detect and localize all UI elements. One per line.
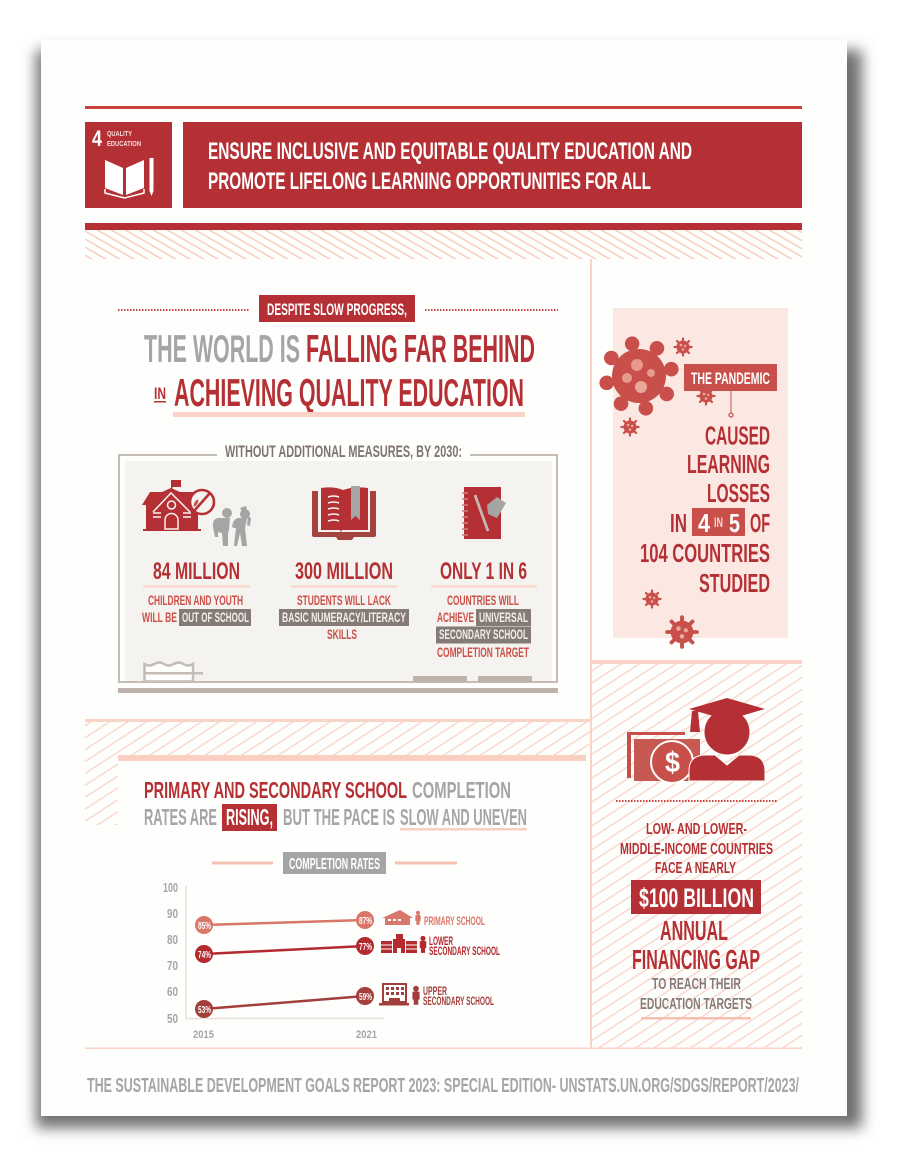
series: lower secondary [195, 937, 374, 963]
series: upper secondary: 53% [198, 1005, 211, 1016]
text: caused learning losses: IN [670, 508, 687, 538]
stat: 84 million [142, 558, 251, 626]
icon: small viruses [622, 338, 697, 647]
text: caused learning losses: 104 COUNTRIES [640, 538, 770, 568]
y axis labels: 50 [167, 1012, 178, 1026]
stat: only 1 in 6: SECONDARY SCHOOL [439, 627, 528, 642]
callout: 100 billion: $100 BILLION [639, 883, 754, 913]
series: upper secondary: 59% [359, 992, 372, 1003]
text: annual financing gap: FINANCING GAP [632, 944, 760, 975]
icon: graduate with money: $ [665, 747, 680, 779]
panel: falling behind heading [118, 295, 558, 417]
panel: falling behind heading: FALLING FAR BEHIND [306, 328, 535, 371]
heading: completion rates rising: RATES ARE [144, 804, 217, 830]
series: primary school: 85% [198, 921, 211, 932]
stat: only 1 in 6: UNIVERSAL [479, 610, 528, 625]
text: low income countries: FACE A NEARLY [655, 860, 736, 877]
text: caused learning losses: LEARNING [687, 451, 770, 479]
y axis labels: 70 [167, 959, 178, 973]
text: caused learning losses: OF [750, 508, 770, 538]
heading: completion rates rising: PRIMARY AND SECONDARY SCHOOL [144, 777, 407, 803]
text: caused learning losses: IN [714, 514, 723, 530]
y axis labels: 90 [167, 907, 178, 921]
header thick rule [85, 223, 802, 230]
text: caused learning losses: STUDIED [699, 568, 770, 598]
chart title: completion rates: COMPLETION RATES [289, 856, 380, 873]
header top rule [85, 106, 802, 109]
icon: SDG 4 quality education tile: EDUCATION [107, 139, 141, 148]
icon: large virus [598, 335, 680, 417]
stat: 300 million [279, 558, 409, 642]
panel: falling behind heading: THE WORLD IS [144, 328, 300, 371]
legend: upper secondary school: UPPER [423, 984, 447, 998]
line chart [163, 881, 384, 1041]
stat: 300 million: STUDENTS WILL LACK [297, 593, 391, 608]
completion section rule [118, 755, 586, 761]
panel: right column divider [590, 259, 592, 1048]
text: caused learning losses [640, 422, 770, 598]
legend: lower secondary school: LOWER [429, 934, 453, 948]
x axis labels: 2021 [356, 1029, 377, 1041]
left section rule [85, 719, 591, 722]
legend: upper secondary school: SECONDARY SCHOOL [423, 994, 494, 1008]
text: low income countries [620, 821, 773, 877]
legend: lower secondary school [381, 934, 500, 958]
icon: closed school with children [142, 480, 251, 546]
text: caused learning losses: 5 [729, 508, 740, 538]
text: caused learning losses: 4 [698, 508, 710, 538]
text: caused learning losses: CAUSED [705, 422, 770, 450]
series: lower secondary: 77% [359, 942, 372, 953]
header hatch band [85, 230, 802, 259]
y axis labels: 80 [167, 933, 178, 947]
icon: notebook with pencil and eraser [462, 487, 506, 539]
stat: only 1 in 6: ACHIEVE [437, 610, 474, 625]
series: lower secondary: 74% [198, 950, 211, 961]
header banner: PROMOTE LIFELONG LEARNING OPPORTUNITIES FOR ALL [208, 168, 651, 195]
icon: graduate with money [627, 698, 765, 783]
text: low income countries: MIDDLE-INCOME COUNTRIES [620, 841, 773, 858]
stat: 300 million: BASIC NUMERACY/LITERACY [282, 610, 406, 625]
chart axes [186, 886, 384, 1018]
heading: completion rates rising [144, 777, 527, 831]
stat: 84 million: CHILDREN AND YOUTH [148, 593, 243, 608]
stat: 84 million: OUT OF SCHOOL [182, 610, 249, 625]
text: annual financing gap: TO REACH THEIR [652, 976, 741, 993]
x axis labels: 2015 [193, 1029, 214, 1041]
text: annual financing gap: ANNUAL [660, 915, 728, 946]
footer rule [85, 1048, 802, 1049]
tag: the pandemic: THE PANDEMIC [691, 369, 770, 388]
header banner [183, 122, 802, 208]
stat: 84 million: 84 MILLION [153, 558, 240, 585]
icon: SDG 4 quality education tile: 4 [92, 126, 103, 151]
stat: 300 million: 300 MILLION [295, 558, 393, 585]
text: annual financing gap [632, 915, 760, 1020]
stat: only 1 in 6: ONLY 1 IN 6 [440, 558, 527, 585]
callout: 100 billion [631, 880, 761, 914]
stat: 84 million: WILL BE [142, 610, 177, 625]
panel: chalkboard by 2030 [118, 442, 558, 693]
text: annual financing gap: EDUCATION TARGETS [640, 996, 752, 1013]
stat: only 1 in 6 [431, 558, 537, 660]
heading: completion rates rising: RISING, [226, 804, 273, 830]
y axis labels [163, 881, 178, 1026]
legend: primary school [382, 910, 485, 928]
tag: the pandemic [684, 364, 777, 417]
stat: only 1 in 6: COMPLETION TARGET [437, 645, 529, 660]
chart title: completion rates [212, 852, 457, 874]
legend: upper secondary school [379, 984, 494, 1008]
stat: only 1 in 6: COUNTRIES WILL [447, 593, 519, 608]
panel: falling behind heading: IN [154, 384, 166, 403]
x axis labels [193, 1029, 377, 1041]
series: primary school [195, 911, 374, 934]
text: caused learning losses: LOSSES [707, 480, 770, 508]
icon: SDG 4 quality education tile [85, 122, 172, 208]
panel: falling behind heading: ACHIEVING QUALITY EDUCATION [174, 372, 524, 415]
legend: lower secondary school: SECONDARY SCHOOL [429, 944, 500, 958]
y axis labels: 100 [163, 881, 178, 895]
panel: financing gap [592, 660, 802, 1048]
legend: primary school: PRIMARY SCHOOL [424, 914, 485, 928]
heading: completion rates rising: BUT THE PACE IS [283, 804, 395, 830]
heading: completion rates rising: COMPLETION [412, 777, 511, 803]
panel: pandemic [598, 308, 788, 647]
stat: 300 million: SKILLS [327, 627, 357, 642]
text: low income countries: LOW- AND LOWER- [646, 821, 747, 838]
left hatch band [85, 722, 591, 825]
series: primary school: 87% [359, 916, 372, 927]
y axis labels: 60 [167, 985, 178, 999]
panel: falling behind heading: DESPITE SLOW PROGRESS, [267, 300, 407, 319]
panel: chalkboard by 2030: WITHOUT ADDITIONAL MEASURES, BY 2030: [225, 442, 462, 461]
heading: completion rates rising: SLOW AND UNEVEN [400, 804, 527, 830]
icon: open book with bookmark [312, 486, 376, 540]
series: upper secondary [195, 987, 374, 1018]
icon: SDG 4 quality education tile: QUALITY [107, 129, 132, 138]
